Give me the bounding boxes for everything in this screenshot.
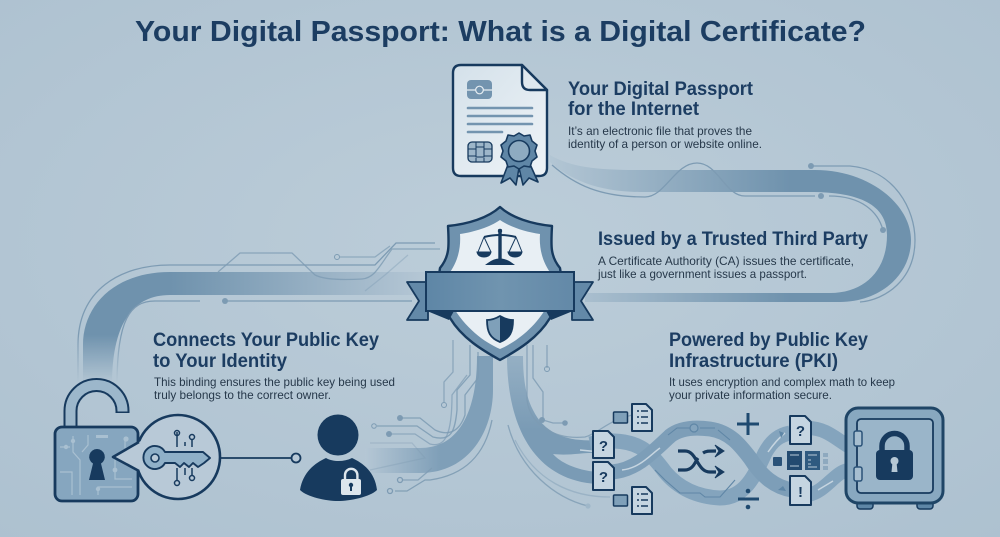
icon: question document left bottom: ? xyxy=(599,469,608,486)
icon: question document right xyxy=(790,416,811,444)
text: digital passport description xyxy=(568,124,762,151)
icon: scales of justice xyxy=(477,229,522,264)
text: public key identity description: This binding ensures the public key being used xyxy=(154,375,395,389)
icon: question document left bottom xyxy=(593,462,614,490)
heading: public key infrastructure xyxy=(669,330,868,372)
ribbon: shield to encryption braid xyxy=(507,345,640,509)
heading: digital passport: for the Internet xyxy=(568,99,700,120)
icon: exclamation document xyxy=(790,476,811,505)
heading: public key infrastructure: Infrastructure (PKI) xyxy=(669,351,838,372)
heading: digital passport: Your Digital Passport xyxy=(568,79,754,100)
heading: public key infrastructure: Powered by Public Key xyxy=(669,330,868,351)
heading: public key identity: Connects Your Public Key xyxy=(153,330,379,351)
text: public key infrastructure description xyxy=(669,375,895,402)
text: public key identity description: truly belongs to the correct owner. xyxy=(154,388,331,402)
text: public key identity description xyxy=(154,375,395,402)
text: trusted third party description: just like a government issues a passport. xyxy=(597,267,807,281)
ribbon: document to shield xyxy=(550,155,915,302)
icon: trust shield with banner xyxy=(407,207,593,360)
heading: public key identity xyxy=(153,330,379,372)
icon: small shield xyxy=(487,316,513,342)
icon: shuffle arrows xyxy=(678,445,724,478)
ribbon: shield to person xyxy=(365,340,493,494)
heading: public key identity: to Your Identity xyxy=(153,351,287,372)
icon: key in magnifier bubble xyxy=(113,415,220,499)
connector: key to person xyxy=(220,454,300,462)
icon: file with usb bottom xyxy=(614,487,652,514)
icon: open padlock xyxy=(55,385,138,501)
ribbon: shield to lock xyxy=(78,243,440,385)
icon: person with padlock xyxy=(300,414,377,501)
icon: file with usb top xyxy=(614,404,652,431)
icon: safe with padlock xyxy=(846,408,943,509)
icon: question document left top: ? xyxy=(599,438,608,455)
title: Your Digital Passport: What is a Digital Certificate? xyxy=(135,16,866,48)
text: trusted third party description xyxy=(597,254,854,281)
icon: divide sign xyxy=(738,489,759,509)
heading: digital passport xyxy=(568,79,754,120)
text: public key infrastructure description: It uses encryption and complex math to keep xyxy=(669,375,895,389)
icon: question document left top xyxy=(593,431,614,458)
icon: exclamation document: ! xyxy=(798,484,803,501)
heading: trusted third party: Issued by a Trusted Third Party xyxy=(598,229,868,250)
icon: key xyxy=(143,446,210,469)
banner xyxy=(426,272,574,311)
icon: question document right: ? xyxy=(796,423,805,440)
icon: small encrypted data blocks xyxy=(773,451,828,470)
chart: intertwined encryption streams xyxy=(580,424,848,498)
text: trusted third party description: A Certificate Authority (CA) issues the certificate, xyxy=(598,254,854,268)
text: public key infrastructure description: your private information secure. xyxy=(669,388,832,402)
text: digital passport description: It’s an electronic file that proves the xyxy=(568,124,752,138)
text: digital passport description: identity of a person or website online. xyxy=(568,137,762,151)
icon: banner tails xyxy=(407,282,593,320)
icon: certificate document xyxy=(453,65,547,185)
icon: plus sign xyxy=(737,413,759,435)
